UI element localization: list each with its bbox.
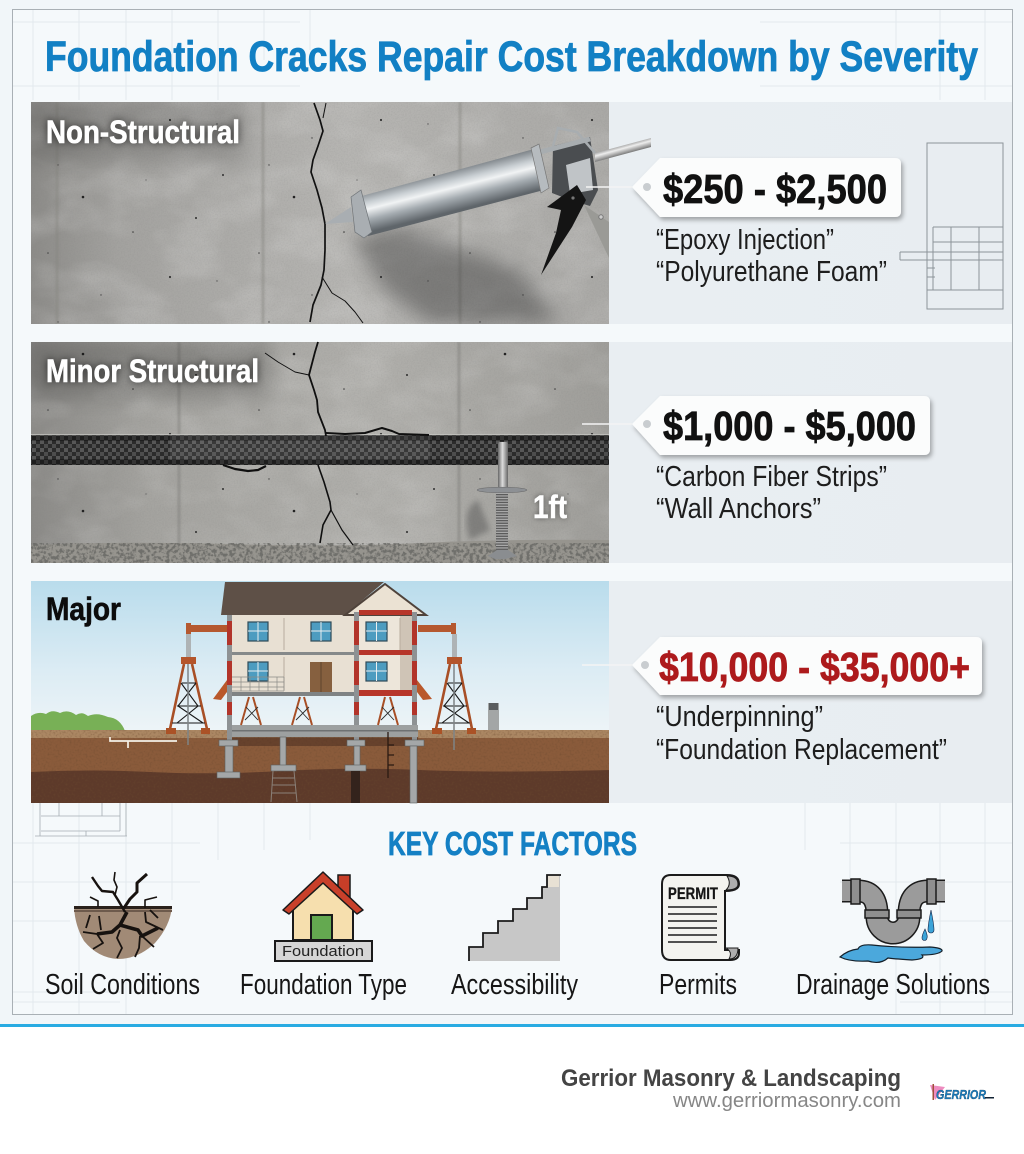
utility cylinder [488, 703, 499, 730]
wall crack [310, 103, 363, 323]
right background: minor structural [609, 342, 1012, 563]
bush [31, 711, 125, 731]
repair methods [656, 224, 887, 288]
price tag: $10,000 - $35,000+ [659, 644, 970, 690]
heading: major: Major [46, 591, 121, 627]
footer: logo: GERRIOR [936, 1087, 987, 1102]
leader line [582, 423, 632, 425]
repair methods: “Epoxy Injection” [656, 224, 834, 256]
price tag [632, 158, 901, 217]
carbon fiber strip [31, 434, 609, 465]
steel posts and slab [227, 612, 418, 740]
panel: non-structural [25, 100, 1012, 324]
concrete wall image [25, 100, 609, 324]
price tag: $1,000 - $5,000 [663, 403, 916, 449]
icon: soil conditions [74, 872, 172, 959]
icon: stairs [469, 875, 561, 961]
gun shadow [352, 225, 560, 324]
scaffold grid [232, 677, 284, 691]
footer divider [0, 1024, 1024, 1027]
repair methods [656, 701, 947, 766]
price tag [632, 637, 982, 695]
panel: minor structural [25, 338, 1012, 563]
house [221, 582, 426, 696]
icon: permit scroll [662, 875, 739, 960]
label: accessibility: Accessibility [451, 969, 578, 1001]
heading: key cost factors: KEY COST FACTORS [388, 825, 637, 862]
footer: company name: Gerrior Masonry & Landscaping [561, 1065, 901, 1092]
windows [248, 622, 387, 681]
label: foundation type: Foundation Type [240, 969, 407, 1001]
leader line [582, 664, 632, 666]
left tower [166, 623, 227, 745]
right tower [418, 623, 476, 750]
repair methods: “Foundation Replacement” [656, 734, 947, 766]
repair methods: “Underpinning” [656, 701, 823, 733]
cost factor labels [45, 969, 990, 1001]
wall crack [223, 342, 429, 545]
label: soil conditions: Soil Conditions [45, 969, 200, 1001]
leader line [586, 186, 632, 188]
dimension label: 1ft [533, 489, 567, 525]
repair methods: “Polyurethane Foam” [656, 256, 887, 288]
foundation piers [217, 737, 424, 803]
repair methods [656, 461, 887, 525]
soil layers [31, 730, 609, 803]
icon: foundation house: Foundation [282, 943, 364, 960]
heading: minor structural: Minor Structural [46, 353, 259, 389]
door [310, 662, 332, 692]
ladder and helical pile [271, 732, 394, 803]
heading: non-structural: Non-Structural [46, 114, 240, 150]
icon: leaking pipe [840, 879, 945, 962]
icon: permit scroll: PERMIT [668, 884, 718, 903]
heading: non-structural: Non-Structural [46, 114, 240, 150]
small jack stands [241, 697, 398, 725]
buried pipe [110, 737, 177, 748]
label: permits: Permits [659, 969, 737, 1001]
icon: foundation house [275, 872, 372, 961]
wall anchor [477, 442, 527, 559]
sky [31, 581, 609, 731]
repair methods: “Carbon Fiber Strips” [656, 461, 887, 493]
concrete wall image [31, 342, 609, 546]
gravel strip [31, 540, 609, 563]
panel: major [31, 581, 1012, 803]
right background: major [609, 581, 1012, 803]
blueprint sketch bottom left [35, 803, 127, 836]
footer: website: www.gerriormasonry.com [672, 1090, 901, 1112]
price tag: $250 - $2,500 [663, 166, 887, 212]
repair methods: “Wall Anchors” [656, 493, 821, 525]
icon: caulking gun [325, 128, 651, 275]
heading: minor structural: Minor Structural [46, 353, 259, 389]
right background: non-structural [609, 102, 1012, 324]
blueprint drawing: non-structural [900, 143, 1003, 309]
dimension label: 1ft [533, 489, 567, 525]
price tag [632, 396, 930, 455]
hydraulic braces [213, 680, 432, 700]
support towers [166, 623, 476, 750]
